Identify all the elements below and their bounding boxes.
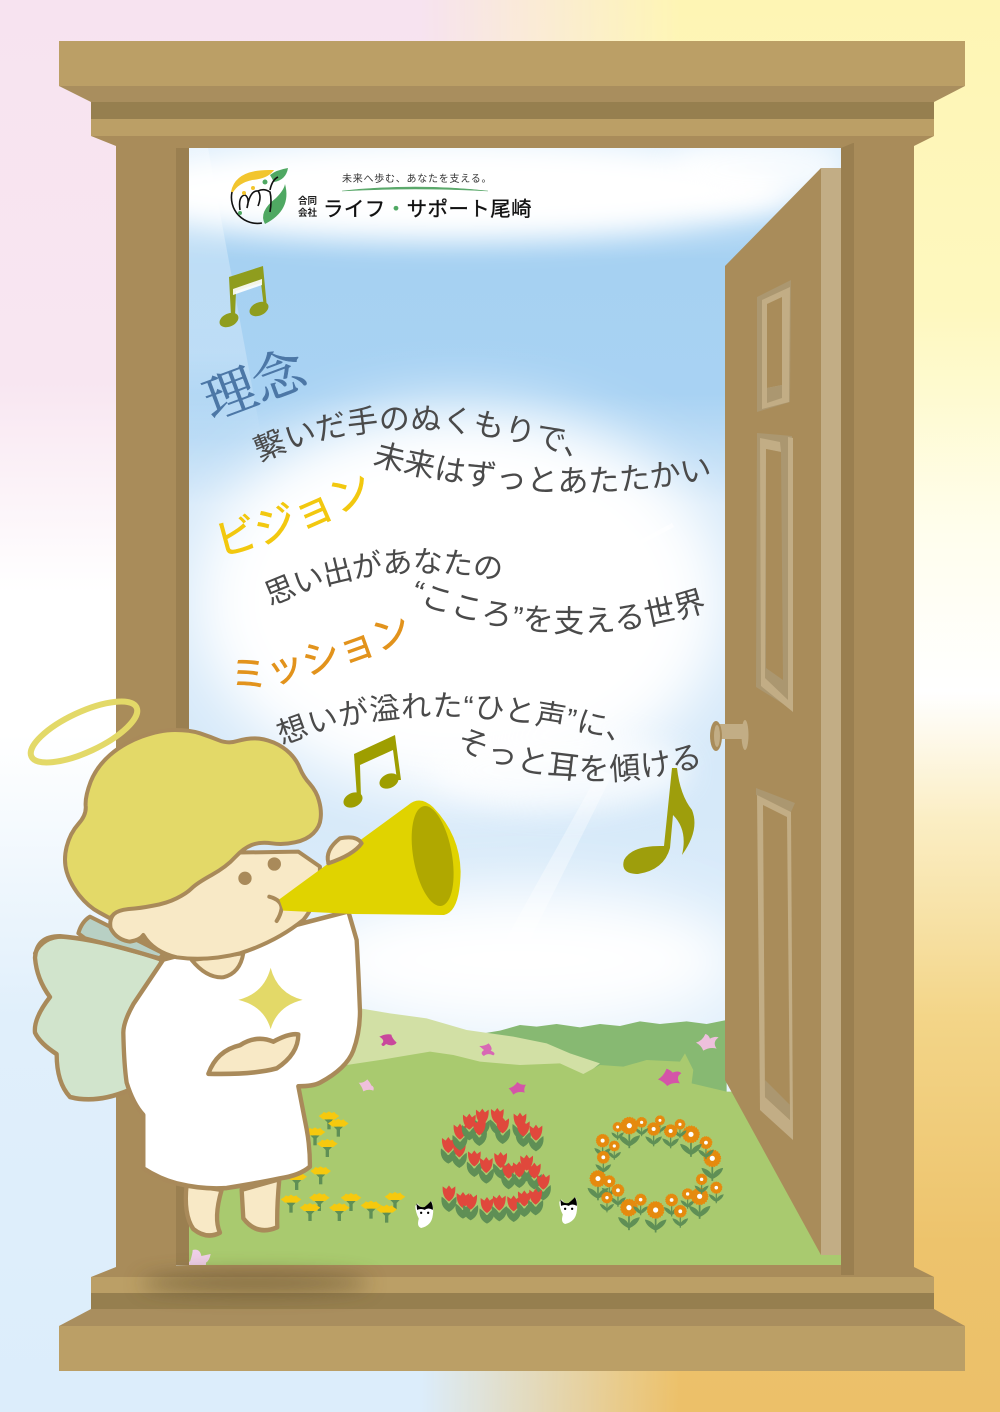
- frame bottom moulding: [59, 1265, 965, 1371]
- heading: vision: ビジョン: [218, 476, 364, 554]
- yellow dandelions: [281, 1111, 405, 1223]
- music note: by the megaphone: [341, 735, 401, 811]
- sky seen through the doorway: [189, 148, 841, 1092]
- meadow with flowers spelling 350: [187, 1000, 847, 1273]
- door knob: [710, 720, 748, 751]
- door leaf: [725, 168, 821, 1255]
- small white creatures: [415, 1197, 577, 1228]
- logo tagline: 未来へ歩む、あなたを支える。: [342, 172, 492, 185]
- vision text line 1: 思い出があなたの: [265, 548, 500, 606]
- door top panel: [757, 280, 791, 412]
- music note: top left: [217, 266, 271, 330]
- front wing top edge: [35, 937, 163, 960]
- back wing: [78, 917, 163, 958]
- frame top moulding: [59, 41, 965, 148]
- eyes: [238, 857, 281, 885]
- vision text line 2: “こころ”を支える世界: [415, 580, 704, 635]
- mouth: [269, 897, 282, 921]
- mission text line 1: 想いが溢れた“ひと声”に、: [276, 692, 614, 744]
- hand: [208, 1034, 298, 1074]
- foreground pink flower: [189, 1250, 211, 1265]
- feet: [186, 1179, 279, 1235]
- door edge: [821, 168, 841, 1255]
- philosophy text line 1: 繋いだ手のぬくもりで、: [252, 405, 572, 462]
- star on robe: [238, 968, 303, 1029]
- door middle panel: [756, 433, 793, 712]
- logo company name: ライフ・サポート尾崎: [323, 198, 532, 221]
- open door: [710, 168, 841, 1255]
- frame columns: [116, 140, 914, 1270]
- heading: philosophy: 理念: [200, 351, 307, 418]
- logo company type: 会社: [298, 207, 318, 219]
- logo green arc: [342, 187, 488, 191]
- far tree line: [486, 1020, 727, 1092]
- main grass: [187, 1052, 847, 1267]
- angel character: [23, 689, 461, 1235]
- logo mark: [231, 168, 288, 224]
- face: [110, 852, 320, 959]
- light green hill: [347, 1008, 600, 1074]
- wings, feet and robe: [35, 911, 360, 1235]
- pink flowers: [359, 1034, 719, 1095]
- orange marigolds: [588, 1116, 724, 1233]
- hair: [65, 730, 321, 918]
- philosophy text line 2: 未来はずっとあたたかい: [374, 442, 710, 494]
- logo company type: 合同: [298, 195, 317, 207]
- head, megaphone and thumb: [35, 730, 461, 977]
- music note: right: [623, 768, 694, 874]
- heading: mission: ミッション: [236, 618, 404, 688]
- robe: [123, 911, 360, 1188]
- star and hand: [208, 968, 303, 1074]
- door bottom panel: [756, 788, 795, 1140]
- front wing: [35, 936, 162, 1099]
- megaphone: [279, 801, 461, 915]
- thumb: [328, 837, 362, 863]
- collar: [192, 953, 243, 977]
- company logo: [231, 168, 532, 224]
- red tulips: [441, 1108, 551, 1224]
- mission text line 2: そっと耳を傾ける: [462, 729, 698, 782]
- shadow on threshold: [140, 1273, 370, 1293]
- halo: [23, 689, 145, 775]
